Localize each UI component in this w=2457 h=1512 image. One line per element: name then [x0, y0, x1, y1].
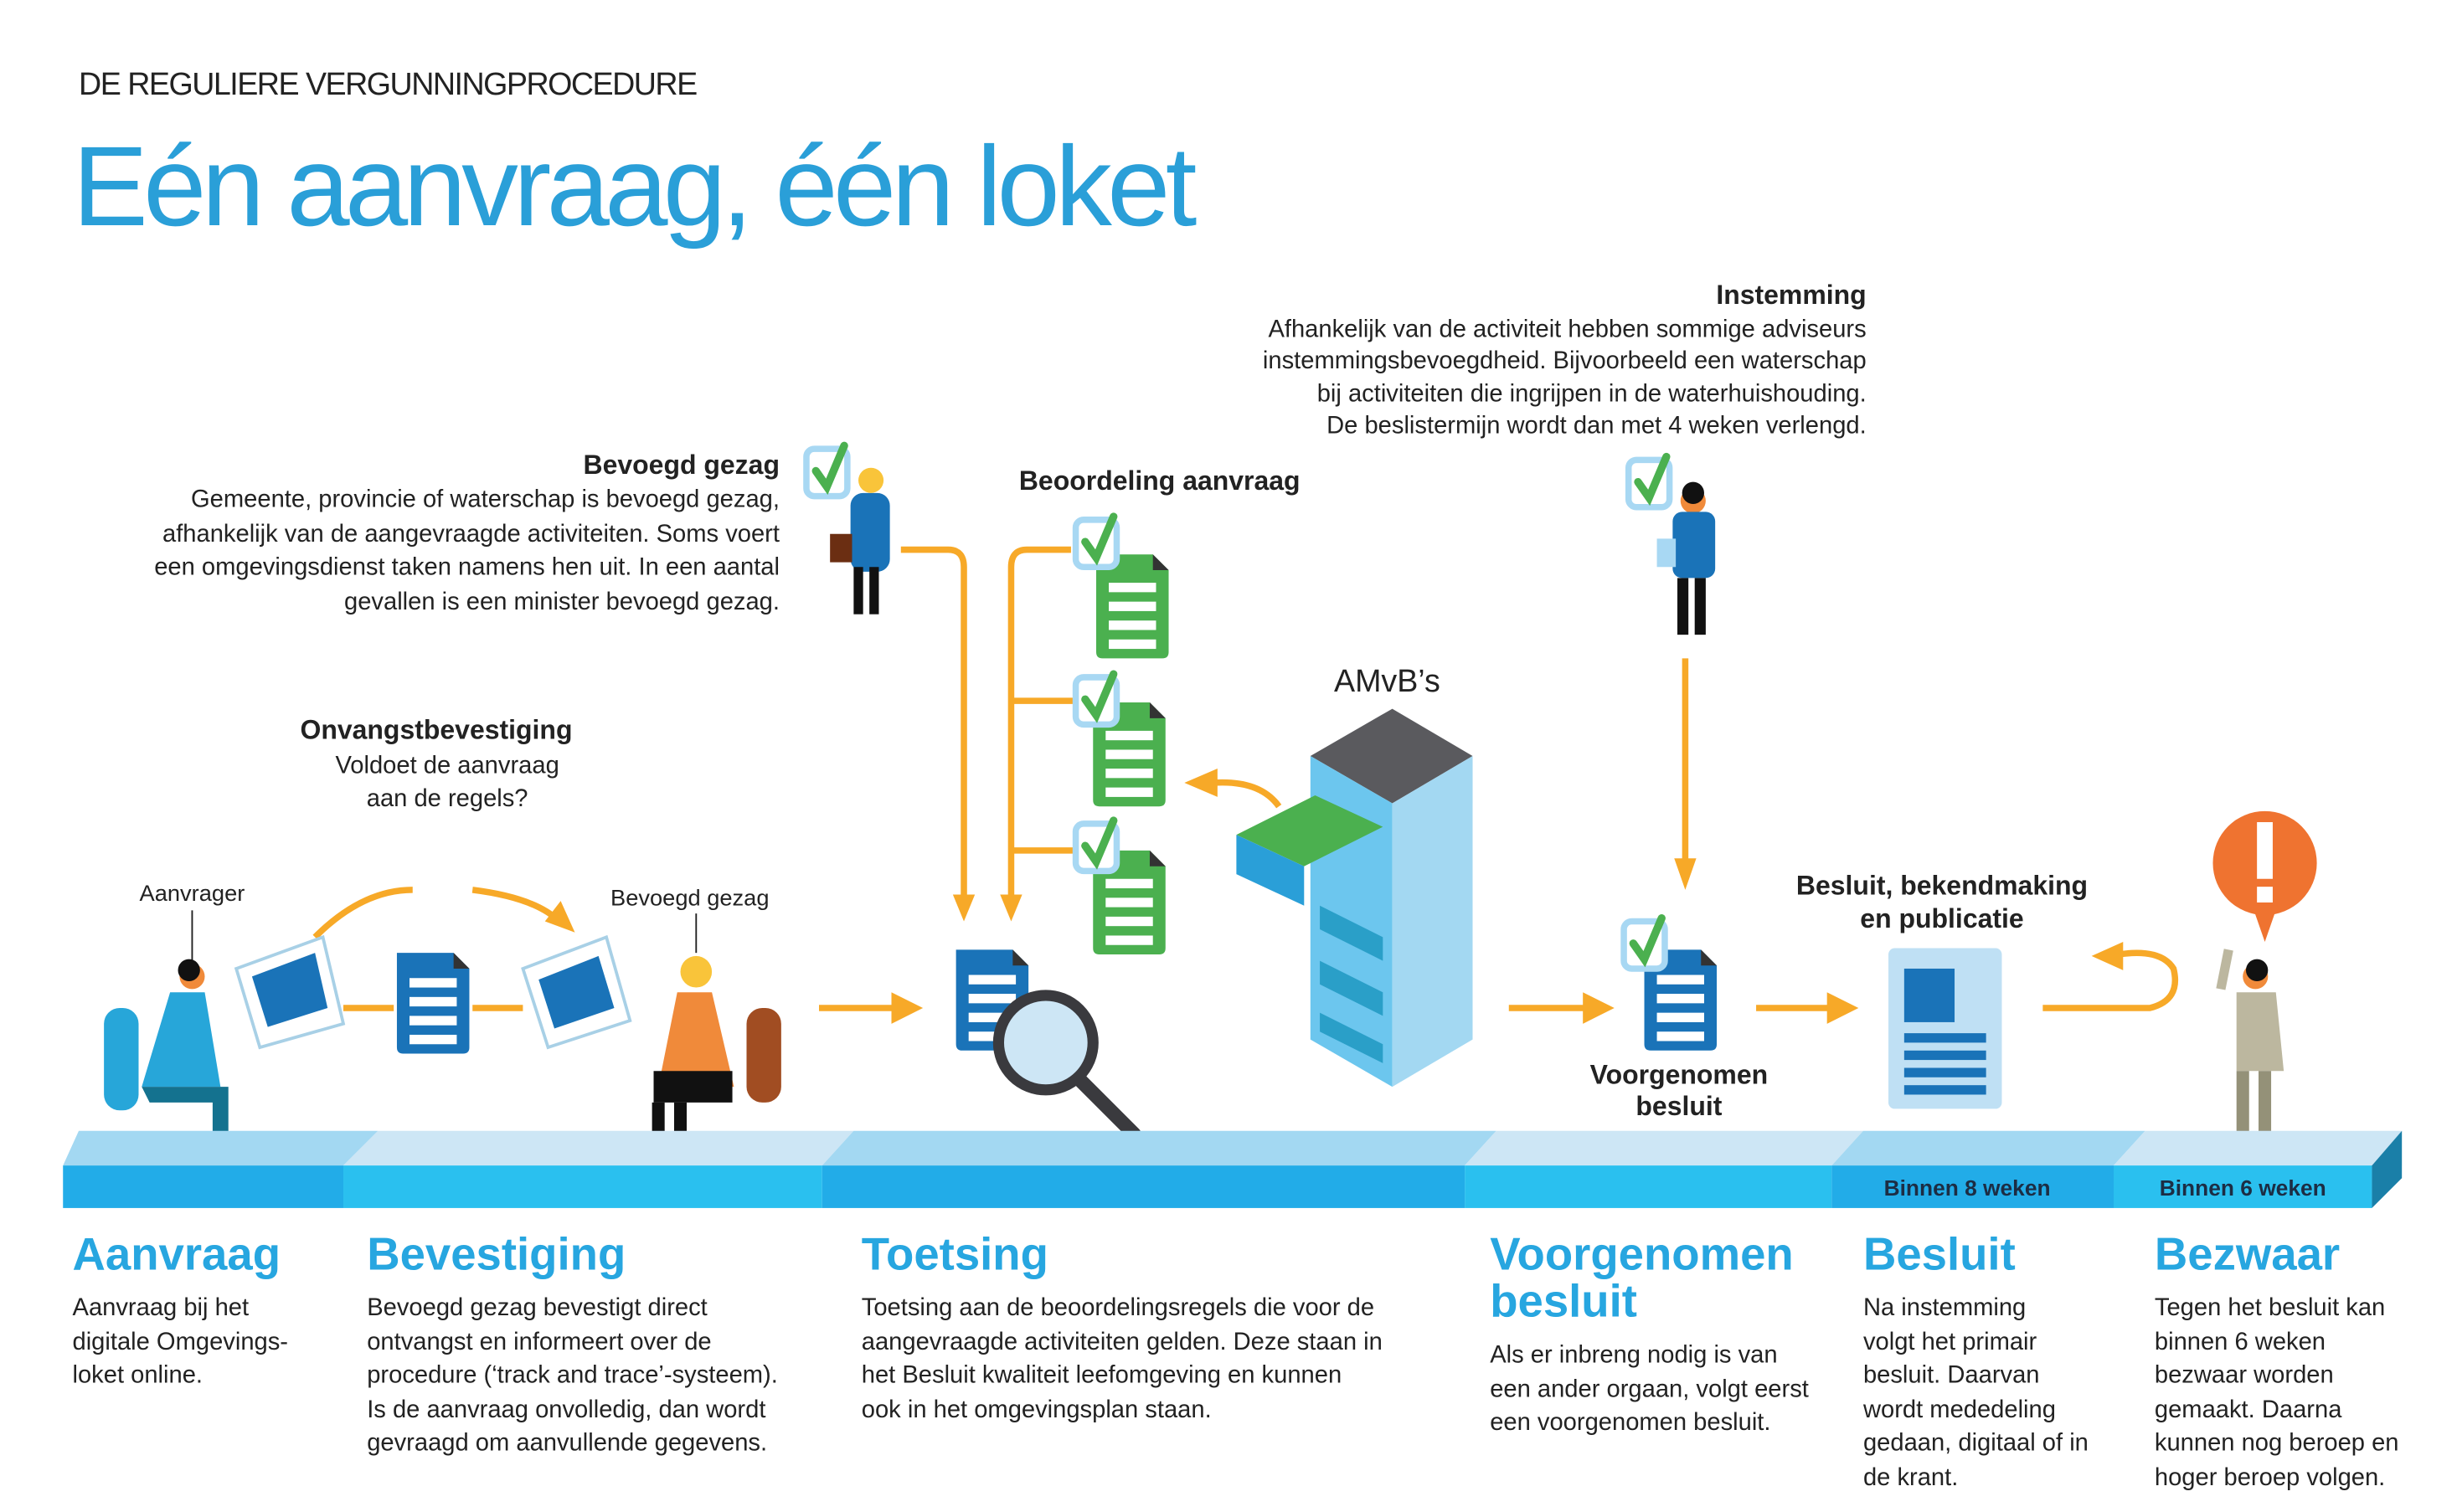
text block: instemming: De beslistermijn wordt dan met 4 weken verlengd.: [1326, 412, 1867, 439]
text block: bevoegd gezag: Bevoegd gezag: [584, 450, 780, 480]
column: bezwaar: Tegen het besluit kan: [2155, 1294, 2385, 1321]
column: voorgenomen besluit: [1490, 1228, 1809, 1436]
column: bezwaar: gemaakt. Daarna: [2155, 1396, 2342, 1423]
text block: bevoegd gezag: gevallen is een minister bevoegd gezag.: [344, 589, 780, 615]
text block: instemming: Afhankelijk van de activiteit hebben sommige adviseurs: [1268, 316, 1867, 343]
timeline bar: Binnen 6 weken: [2160, 1175, 2326, 1201]
column: bevestiging: [367, 1228, 778, 1457]
subtitle: DE REGULIERE VERGUNNINGPROCEDURE: [79, 66, 698, 101]
icon: AMvB cabinet: [1236, 709, 1473, 1087]
column: voorgenomen besluit: een ander orgaan, volgt eerst: [1490, 1376, 1809, 1403]
column: bezwaar: Bezwaar: [2155, 1228, 2340, 1279]
column: toetsing: aangevraagde activiteiten gelden. Deze staan in: [862, 1329, 1383, 1355]
icon: bevoegd gezag at computer: [523, 937, 781, 1147]
icon: blue document center: [397, 953, 469, 1054]
text block: ontvangstbevestiging: Voldoet de aanvraag: [335, 753, 559, 779]
column: besluit: volgt het primair: [1863, 1329, 2037, 1355]
column: aanvraag: [73, 1228, 288, 1389]
label: besluit bekendmaking: [1796, 871, 2088, 933]
column: voorgenomen besluit: Als er inbreng nodig is van: [1490, 1341, 1778, 1368]
icon: bevoegd gezag woman: [806, 445, 890, 615]
text block: instemming: bij activiteiten die ingrijpen in de waterhuishouding.: [1317, 381, 1867, 408]
column: toetsing: [862, 1228, 1383, 1423]
column: besluit: besluit. Daarvan: [1863, 1362, 2040, 1389]
column: voorgenomen besluit: Voorgenomen: [1490, 1228, 1794, 1279]
column: aanvraag: loket online.: [73, 1362, 203, 1389]
icon: aanvrager at computer: [104, 937, 343, 1147]
icon: green documents: [1076, 517, 1169, 954]
column: bevestiging: Bevoegd gezag bevestigt direct: [367, 1294, 708, 1321]
icon: bezwaar person with exclamation: [2212, 811, 2317, 1140]
text block: ontvangstbevestiging: aan de regels?: [367, 785, 528, 812]
label: voorgenomen besluit: besluit: [1635, 1091, 1723, 1121]
column: besluit: de krant.: [1863, 1464, 1958, 1491]
icon: besluit publication: [1888, 949, 2001, 1108]
text block: instemming: [1263, 280, 1867, 439]
column: bevestiging: gevraagd om aanvullende gegevens.: [367, 1430, 767, 1457]
icon: voorgenomen besluit document: [1624, 918, 1717, 1051]
label: aanvrager: Aanvrager: [140, 880, 245, 906]
text block: instemming: instemmingsbevoegdheid. Bijvoorbeeld een waterschap: [1263, 347, 1867, 374]
text block: bevoegd gezag: een omgevingsdienst taken namens hen uit. In een aantal: [154, 554, 780, 581]
timeline bar: [63, 1131, 2402, 1208]
column: bevestiging: Bevestiging: [367, 1228, 626, 1279]
column: bezwaar: hoger beroep volgen.: [2155, 1464, 2385, 1491]
icon: document with magnifier: [956, 949, 1134, 1134]
column: bezwaar: [2155, 1228, 2399, 1491]
column: voorgenomen besluit: besluit: [1490, 1276, 1637, 1327]
column: besluit: gedaan, digitaal of in: [1863, 1430, 2089, 1457]
column: besluit: [1862, 1228, 2089, 1491]
label: voorgenomen besluit: [1590, 1059, 1768, 1121]
label: AMvB's: AMvB’s: [1334, 663, 1440, 698]
label: besluit bekendmaking: en publicatie: [1860, 903, 2024, 933]
timeline bar: Binnen 8 weken: [1884, 1175, 2051, 1201]
column: aanvraag: Aanvraag bij het: [73, 1294, 249, 1321]
heading: beoordeling aanvraag: Beoordeling aanvraag: [1019, 465, 1301, 496]
label: voorgenomen besluit: Voorgenomen: [1590, 1059, 1768, 1089]
column: bezwaar: binnen 6 weken: [2155, 1329, 2326, 1355]
column: bezwaar: bezwaar worden: [2155, 1362, 2334, 1389]
column: toetsing: Toetsing: [862, 1228, 1048, 1279]
label: bevoegd gezag: Bevoegd gezag: [610, 885, 770, 911]
column: voorgenomen besluit: een voorgenomen besluit.: [1490, 1409, 1771, 1436]
text block: bevoegd gezag: [154, 450, 780, 615]
arrows: [315, 550, 2175, 1008]
text block: instemming: Instemming: [1716, 280, 1867, 310]
column: bezwaar: kunnen nog beroep en: [2155, 1430, 2399, 1457]
column: aanvraag: Aanvraag: [73, 1228, 281, 1279]
column: bevestiging: procedure (‘track and trace’-systeem).: [367, 1362, 778, 1389]
text block: ontvangstbevestiging: Onvangstbevestiging: [300, 714, 572, 744]
column: besluit: Besluit: [1863, 1228, 2016, 1279]
icon: instemming man: [1629, 457, 1715, 635]
column: toetsing: ook in het omgevingsplan staan.: [862, 1396, 1212, 1423]
column: besluit: Na instemming: [1863, 1294, 2026, 1321]
text block: bevoegd gezag: Gemeente, provincie of waterschap is bevoegd gezag,: [191, 486, 780, 513]
column: besluit: wordt mededeling: [1862, 1396, 2056, 1423]
column: toetsing: Toetsing aan de beoordelingsregels die voor de: [862, 1294, 1374, 1321]
label: besluit bekendmaking: Besluit, bekendmaking: [1796, 871, 2088, 901]
column: bevestiging: ontvangst en informeert over de: [367, 1329, 712, 1355]
text block: bevoegd gezag: afhankelijk van de aangevraagde activiteiten. Soms voert: [162, 521, 780, 548]
column: toetsing: het Besluit kwaliteit leefomgeving en kunnen: [862, 1362, 1342, 1389]
title: Eén aanvraag, één loket: [73, 122, 1197, 249]
column: aanvraag: digitale Omgevings-: [73, 1329, 288, 1355]
column: bevestiging: Is de aanvraag onvolledig, dan wordt: [367, 1396, 765, 1423]
text block: ontvangstbevestiging: [300, 714, 572, 812]
label: aanvrager: [140, 880, 245, 961]
